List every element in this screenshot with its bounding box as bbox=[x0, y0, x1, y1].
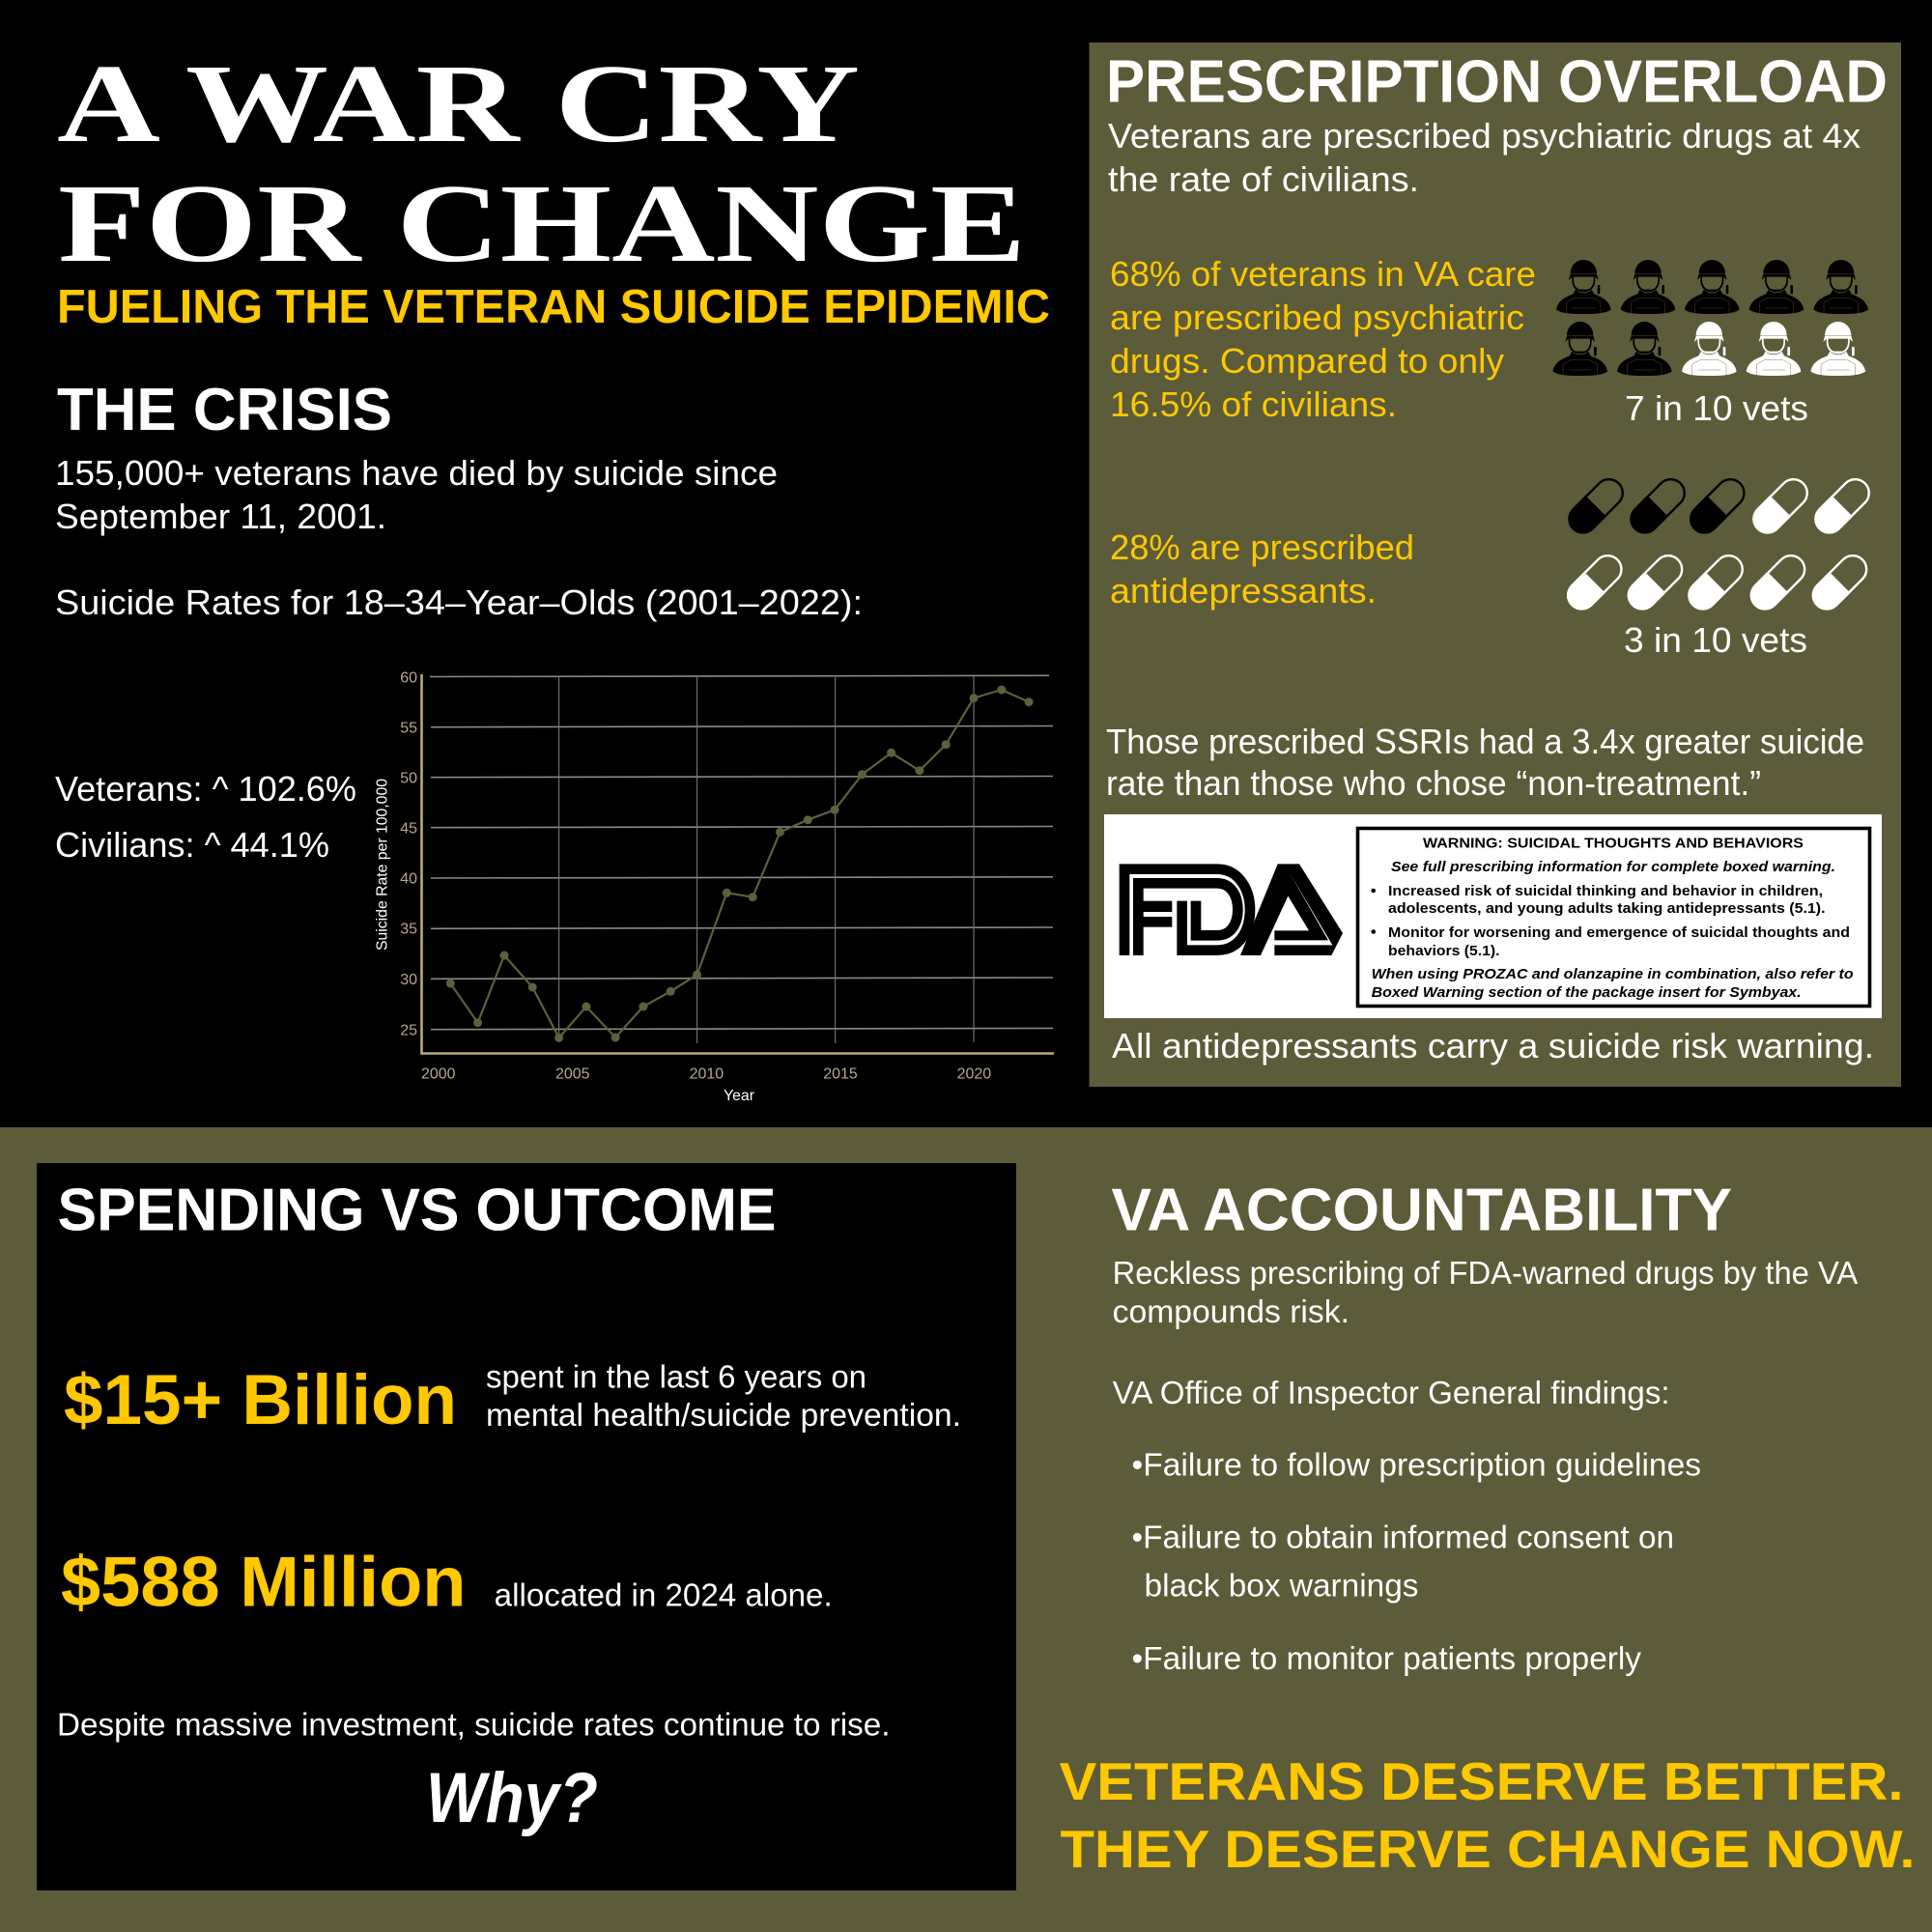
text: reckless prescribing: compounds risk. bbox=[1113, 1293, 1350, 1329]
boxed warning: WARNING: SUICIDAL THOUGHTS AND BEHAVIORS bbox=[1423, 835, 1804, 852]
text: 68 percent stat: are prescribed psychiatric bbox=[1110, 298, 1524, 337]
text: 28 percent stat: antidepressants. bbox=[1110, 571, 1377, 611]
text: spent description: spent in the last 6 years on bbox=[486, 1358, 867, 1395]
text: rate changes bbox=[55, 769, 356, 865]
boxed warning: Boxed Warning section of the package insert for Symbyax. bbox=[1372, 984, 1802, 1001]
line chart: suicide rate: 25 bbox=[400, 1023, 417, 1039]
icon: FDA logo bbox=[1124, 864, 1343, 955]
title bbox=[57, 43, 1026, 286]
text: rate changes: Civilians: ^ 44.1% bbox=[55, 825, 329, 865]
line chart: suicide rate: Suicide Rate per 100,000 bbox=[375, 779, 390, 951]
line chart: suicide rate bbox=[375, 670, 1054, 1104]
text: spent description bbox=[486, 1358, 961, 1433]
text: despite investment: Despite massive investment, suicide rates continue to rise. bbox=[57, 1706, 891, 1743]
label: 7 in 10 vets: 7 in 10 vets bbox=[1625, 388, 1808, 428]
list: findings: black box warnings bbox=[1144, 1567, 1418, 1604]
boxed warning: adolescents, and young adults taking antidepressants (5.1). bbox=[1388, 900, 1826, 917]
stat: 588 million: $588 Million bbox=[61, 1544, 466, 1621]
subtitle: FUELING THE VETERAN SUICIDE EPIDEMIC bbox=[57, 281, 1050, 333]
text: 68 percent stat: 68% of veterans in VA care bbox=[1110, 254, 1536, 294]
text: 68 percent stat bbox=[1110, 254, 1536, 424]
heading: spending vs outcome: SPENDING VS OUTCOME bbox=[58, 1177, 777, 1244]
FDA warning image panel bbox=[1104, 814, 1882, 1018]
list: findings: •Failure to monitor patients properly bbox=[1132, 1640, 1641, 1676]
call to action bbox=[1059, 1751, 1915, 1879]
text: 28 percent stat bbox=[1110, 527, 1414, 611]
text: SSRI risk: Those prescribed SSRIs had a 3.4x greater suicide bbox=[1106, 722, 1864, 761]
call to action: VETERANS DESERVE BETTER. bbox=[1059, 1751, 1903, 1811]
title: A WAR CRY bbox=[57, 43, 860, 166]
text: prescribing rate bbox=[1108, 116, 1861, 199]
line chart: suicide rate: 35 bbox=[400, 922, 417, 938]
call to action: THEY DESERVE CHANGE NOW. bbox=[1061, 1819, 1915, 1879]
text: SSRI risk bbox=[1106, 722, 1864, 803]
line chart: suicide rate: 50 bbox=[400, 771, 417, 787]
heading: prescription overload: PRESCRIPTION OVERLOAD bbox=[1106, 48, 1888, 116]
text: reckless prescribing bbox=[1113, 1255, 1858, 1329]
line chart: suicide rate: 2010 bbox=[690, 1066, 724, 1082]
text: reckless prescribing: Reckless prescribing of FDA-warned drugs by the VA bbox=[1113, 1255, 1858, 1291]
list: findings bbox=[1132, 1447, 1701, 1676]
list: findings: •Failure to follow prescription guidelines bbox=[1132, 1447, 1701, 1482]
text: why: Why? bbox=[426, 1759, 598, 1837]
boxed warning bbox=[1358, 829, 1870, 1007]
text: death toll: September 11, 2001. bbox=[55, 497, 386, 536]
boxed warning: Monitor for worsening and emergence of suicidal thoughts and bbox=[1388, 924, 1850, 941]
boxed warning: behaviors (5.1). bbox=[1388, 943, 1499, 959]
text: rate changes: Veterans: ^ 102.6% bbox=[55, 769, 356, 809]
line chart: suicide rate: 45 bbox=[400, 821, 417, 837]
title: FOR CHANGE bbox=[58, 162, 1026, 286]
caption: warning: All antidepressants carry a suicide risk warning. bbox=[1112, 1026, 1874, 1065]
list: findings: •Failure to obtain informed consent on bbox=[1132, 1519, 1674, 1555]
text: spent description: mental health/suicide prevention. bbox=[486, 1397, 961, 1433]
panel: spending vs outcome bbox=[37, 1163, 1016, 1890]
line chart: suicide rate: 55 bbox=[400, 721, 417, 737]
label: 3 in 10 vets: 3 in 10 vets bbox=[1624, 620, 1807, 660]
line chart: suicide rate: 40 bbox=[400, 871, 417, 888]
text: 68 percent stat: drugs. Compared to only bbox=[1110, 341, 1504, 381]
boxed warning: Increased risk of suicidal thinking and behavior in children, bbox=[1388, 883, 1823, 899]
heading: VA accountability: VA ACCOUNTABILITY bbox=[1111, 1177, 1732, 1244]
text: death toll bbox=[55, 453, 778, 536]
text: prescribing rate: the rate of civilians. bbox=[1108, 159, 1419, 199]
text: 68 percent stat: 16.5% of civilians. bbox=[1110, 384, 1397, 424]
text: SSRI risk: rate than those who chose “non-treatment.” bbox=[1106, 763, 1761, 803]
panel: prescription overload bbox=[1090, 43, 1901, 1087]
boxed warning: See full prescribing information for complete boxed warning. bbox=[1391, 859, 1835, 875]
icon array: soldiers 7 in 10 bbox=[1552, 260, 1868, 376]
boxed warning: When using PROZAC and olanzapine in combination, also refer to bbox=[1372, 966, 1854, 982]
text: allocated: allocated in 2024 alone. bbox=[495, 1577, 833, 1613]
heading: the crisis: THE CRISIS bbox=[57, 377, 392, 443]
line chart: suicide rate: 2005 bbox=[555, 1066, 590, 1082]
line chart: suicide rate: Year bbox=[724, 1088, 755, 1104]
panel: the crisis bbox=[55, 377, 1054, 1104]
panel: VA accountability bbox=[1111, 1177, 1858, 1676]
text: death toll: 155,000+ veterans have died by suicide since bbox=[55, 453, 778, 493]
text: OIG findings intro: VA Office of Inspector General findings: bbox=[1113, 1375, 1670, 1410]
text: chart intro: Suicide Rates for 18–34–Year–Olds (2001–2022): bbox=[55, 582, 863, 622]
line chart: suicide rate: 2015 bbox=[823, 1066, 858, 1082]
text: prescribing rate: Veterans are prescribed psychiatric drugs at 4x bbox=[1108, 116, 1861, 156]
stat: 15 billion: $15+ Billion bbox=[64, 1361, 457, 1439]
line chart: suicide rate: 2000 bbox=[421, 1066, 456, 1082]
bottom olive band bbox=[0, 1127, 1932, 1932]
icon array: pills 3 in 10 bbox=[1561, 472, 1875, 616]
text: 28 percent stat: 28% are prescribed bbox=[1110, 527, 1414, 567]
line chart: suicide rate: 2020 bbox=[957, 1066, 991, 1082]
line chart: suicide rate: 60 bbox=[400, 670, 417, 686]
line chart: suicide rate: 30 bbox=[400, 972, 417, 988]
